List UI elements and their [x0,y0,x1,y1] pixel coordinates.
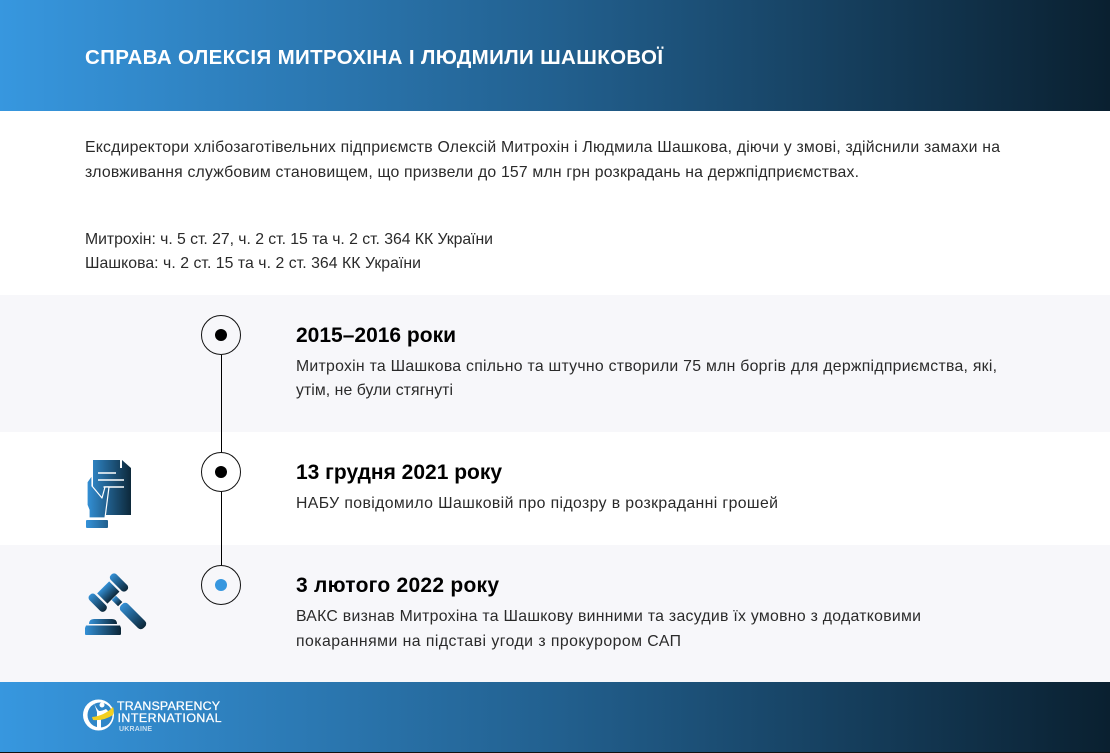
footer band [0,682,1110,753]
event 2: НАБУ повідомило Шашковій про підозру в розкраданні грошей [296,495,778,512]
legal articles text [85,231,493,272]
event 2: 13 грудня 2021 року [296,461,502,484]
intro text: Ексдиректори хлібозаготівельних підприємств Олексій Митрохін і Людмила Шашкова, діючи у змові, здійснили замахи на [85,139,1000,156]
title: СПРАВА ОЛЕКСІЯ МИТРОХІНА І ЛЮДМИЛИ ШАШКОВОЇ [85,46,664,69]
legal articles text: Митрохін: ч. 5 ст. 27, ч. 2 ст. 15 та ч. 2 ст. 364 КК України [85,231,493,248]
timeline marker 1 [202,316,240,354]
event 1 [296,324,997,399]
event 3 [296,574,921,650]
header band [0,0,1110,111]
icon: hand holding document [86,460,131,528]
event 1: Митрохін та Шашкова спільно та штучно створили 75 млн боргів для держпідприємства, які, [296,358,997,375]
timeline connector line [220,355,222,566]
event 3: ВАКС визнав Митрохіна та Шашкову винними та засудив їх умовно з додатковими [296,608,921,625]
logo globe mark [83,700,114,730]
logo: Transparency International Ukraine: TRANSPARENCY [117,699,220,713]
legal articles text: Шашкова: ч. 2 ст. 15 та ч. 2 ст. 364 КК України [85,255,421,272]
event 1: 2015–2016 роки [296,324,456,347]
event 2 [296,461,778,512]
logo: Transparency International Ukraine [83,699,222,733]
event 3: 3 лютого 2022 року [296,574,499,597]
intro text: зловживання службовим становищем, що призвели до 157 млн грн розкрадань на держпідприємствах. [85,164,859,181]
icon: gavel [85,572,148,635]
timeline marker 2 [202,452,240,492]
timeline marker 3 [202,566,240,604]
event 3: покараннями на підставі угоди з прокурором САП [296,633,681,650]
logo: Transparency International Ukraine: UKRAINE [119,726,152,733]
logo: Transparency International Ukraine: INTERNATIONAL [118,711,222,725]
panel: timeline row 1 background [0,295,1110,432]
event 1: утім, не були стягнуті [296,382,453,399]
intro text [85,139,1000,181]
panel: timeline row 3 background [0,545,1110,682]
